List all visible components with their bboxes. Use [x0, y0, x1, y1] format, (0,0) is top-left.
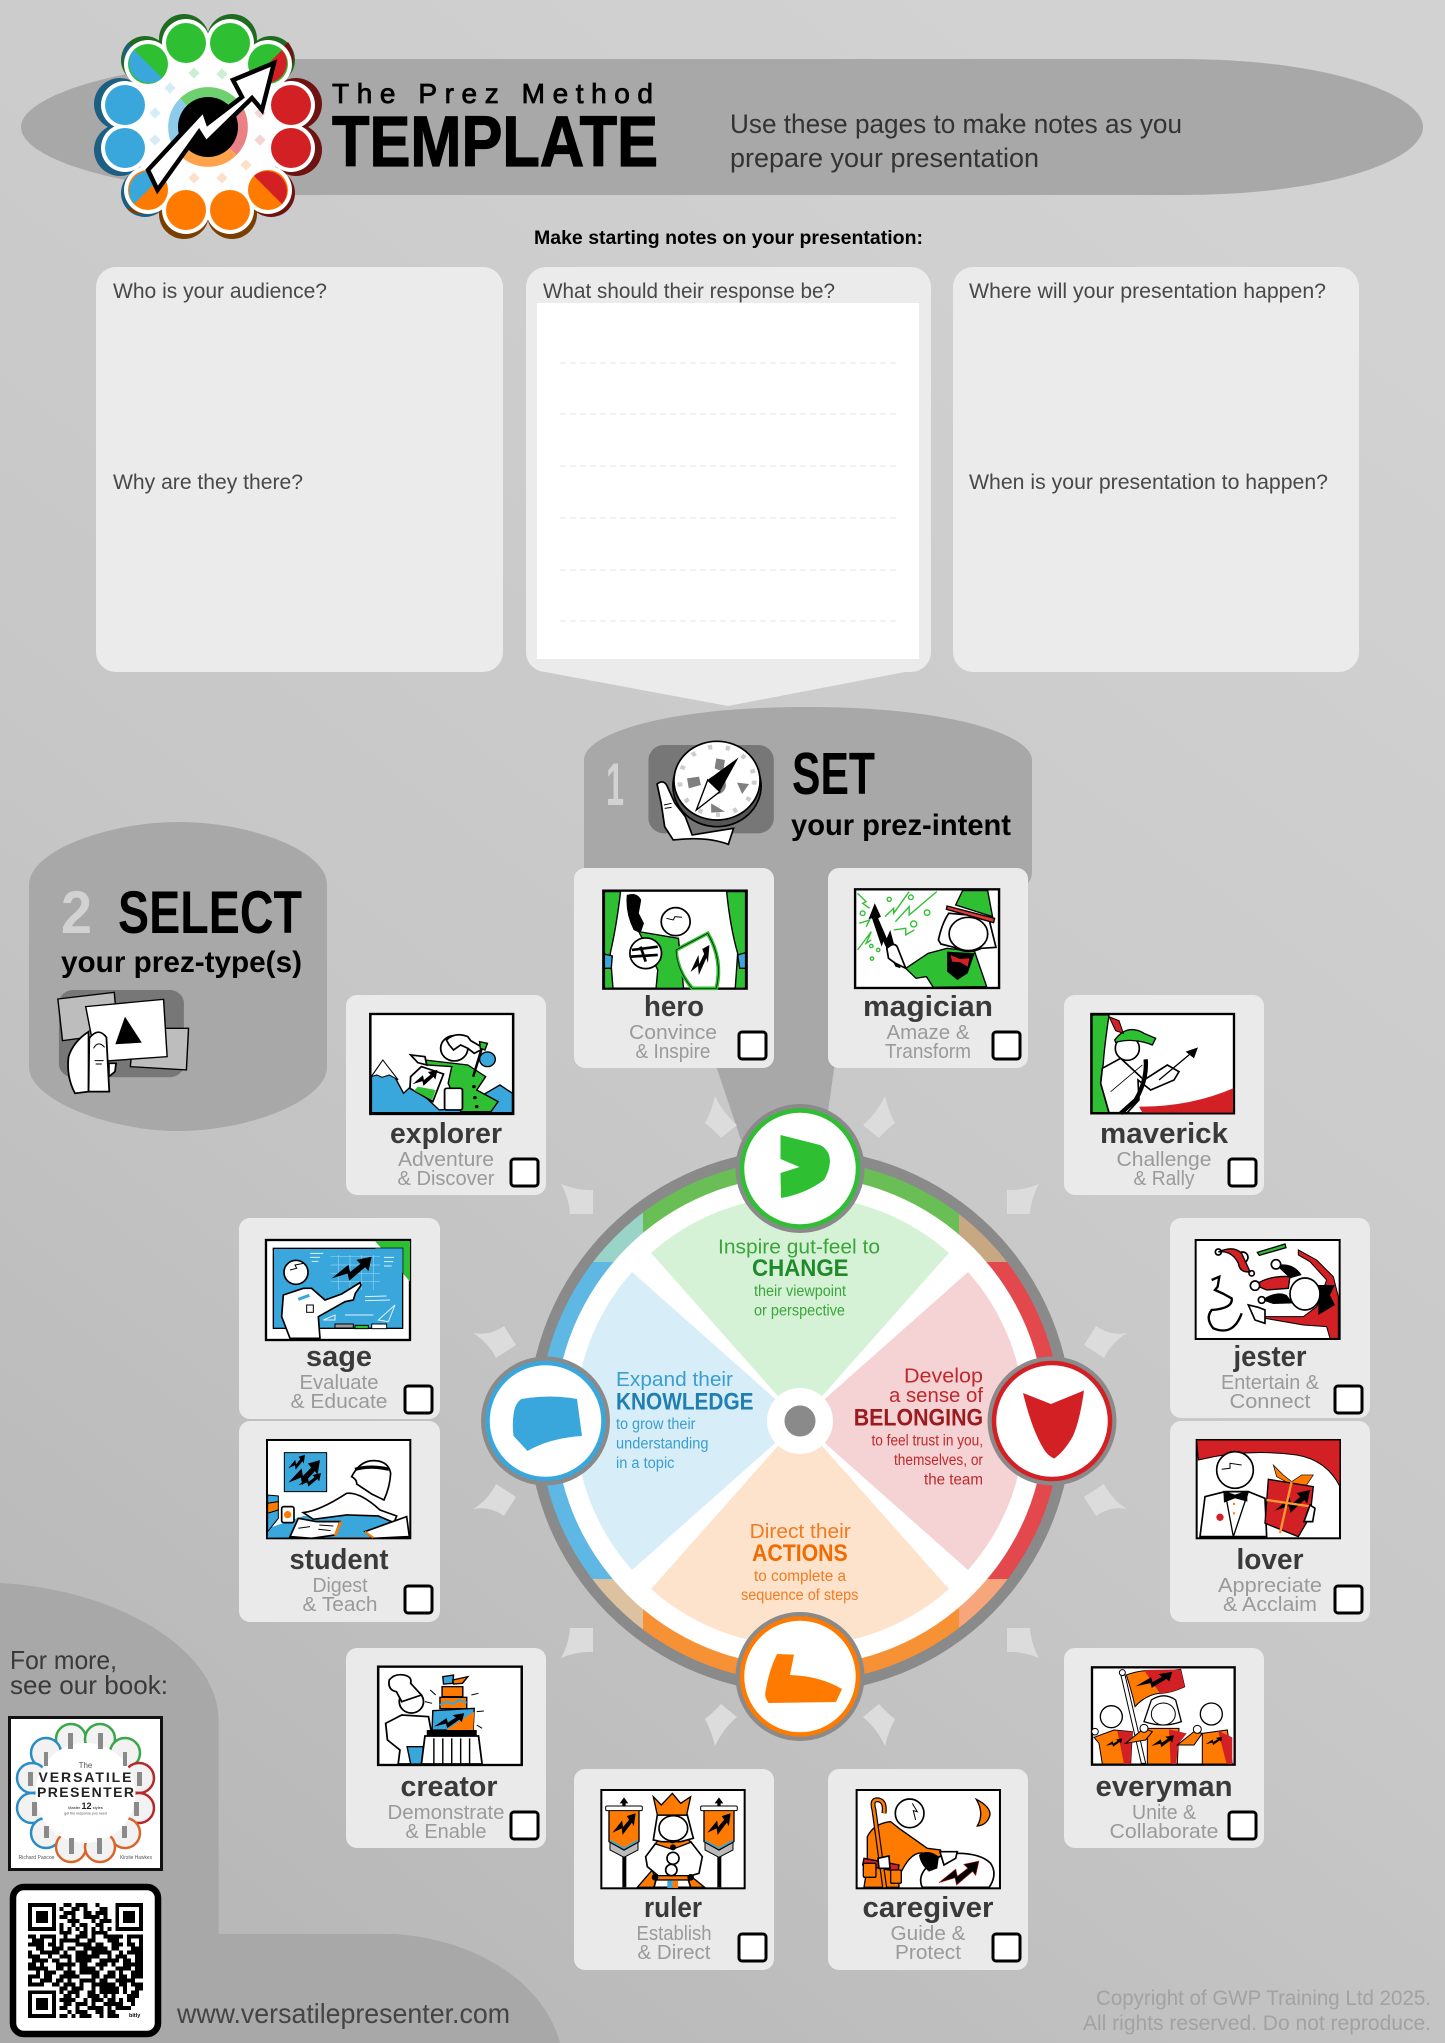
illustration: caregiver: [857, 1790, 1000, 1888]
panel: audience notes: Who is your audience?: [113, 280, 327, 303]
card: everyman: Collaborate: [1110, 1821, 1218, 1843]
card: sage: [239, 1218, 440, 1419]
book cover: Kirstie Hawkes: [120, 1855, 152, 1861]
checkbox: [739, 1032, 766, 1059]
card: everyman: Unite &: [1132, 1802, 1197, 1824]
icon: compass in hand: [648, 741, 774, 844]
text: belonging: to feel trust in you,: [872, 1433, 983, 1450]
book cover: get the response you need: [64, 1812, 107, 1816]
card: hero: [574, 868, 774, 1068]
wedge: knowledge: [575, 1272, 800, 1570]
card: jester: Connect: [1230, 1391, 1311, 1413]
card: lover: & Acclaim: [1223, 1594, 1317, 1616]
card: sage: & Educate: [290, 1391, 388, 1413]
header instructions: prepare your presentation: [730, 143, 1039, 173]
checkbox: [511, 1159, 538, 1186]
card: maverick: Challenge: [1116, 1149, 1212, 1171]
illustration: everyman: [1092, 1667, 1235, 1765]
QR code: bitly: [129, 2013, 141, 2019]
card: caregiver: caregiver: [862, 1892, 994, 1924]
card: hero: & Inspire: [636, 1041, 710, 1063]
panel: step 2 select: your prez-type(s): [61, 946, 302, 979]
panel: where and when notes: [953, 267, 1359, 672]
card: creator: Demonstrate: [388, 1802, 504, 1824]
card: everyman: [1064, 1648, 1264, 1848]
book cover: The: [79, 1761, 93, 1770]
panel: step 1 set: SET: [792, 741, 875, 807]
card: hero: Convince: [629, 1022, 717, 1044]
card: creator: & Enable: [406, 1821, 486, 1843]
panel: response notes with pointer: What should their response be?: [543, 280, 835, 303]
panel: audience notes: [96, 267, 503, 672]
text: change: or perspective: [754, 1302, 845, 1320]
copyright: [1083, 1987, 1431, 2035]
card: student: & Teach: [302, 1594, 378, 1616]
text: knowledge: understanding: [616, 1436, 708, 1453]
panel: where and when notes: Where will your presentation happen?: [969, 280, 1326, 303]
footer panel: [0, 1583, 560, 2043]
checkbox: [993, 1934, 1020, 1961]
text: knowledge: in a topic: [616, 1455, 675, 1472]
panel: step 2 select: [29, 822, 327, 1131]
card: explorer: & Discover: [398, 1168, 495, 1190]
text: knowledge: KNOWLEDGE: [616, 1389, 754, 1416]
card: explorer: [346, 995, 546, 1195]
card: lover: lover: [1236, 1544, 1304, 1576]
card: ruler: [574, 1769, 774, 1970]
card: ruler: ruler: [644, 1892, 702, 1924]
card: jester: [1170, 1218, 1370, 1418]
card: sage: Evaluate: [300, 1372, 378, 1394]
logo: twelve-petal wheel with arrow: [94, 14, 322, 239]
card: lover: [1170, 1421, 1370, 1622]
text: change: their viewpoint: [754, 1283, 847, 1300]
icon node: knowledge: [481, 1356, 610, 1486]
card: caregiver: Protect: [895, 1942, 961, 1964]
card: everyman: everyman: [1096, 1771, 1232, 1803]
panel: step 1 set: [584, 707, 1032, 1140]
book cover: Master 12 styles: [68, 1801, 103, 1811]
card: sage: sage: [306, 1341, 372, 1373]
panel: step 2 select: 2: [61, 879, 92, 946]
card: creator: creator: [400, 1771, 498, 1803]
illustration: explorer: [370, 1014, 513, 1114]
wheel hub: [767, 1388, 833, 1454]
icon: hand holding cards: [58, 990, 189, 1093]
panel: step 1 set: 1: [606, 751, 624, 818]
header band: [21, 59, 1423, 195]
header instructions: Use these pages to make notes as you: [730, 109, 1182, 139]
title: The Prez Method: The Prez Method: [332, 78, 653, 109]
text: actions: [741, 1521, 859, 1604]
decorative sunburst tiles around wheel: [473, 1096, 1127, 1746]
card: maverick: & Rally: [1134, 1168, 1194, 1190]
text: actions: sequence of steps: [741, 1587, 859, 1604]
wedge: actions: [651, 1421, 949, 1646]
icon node: change: [736, 1104, 864, 1233]
card: student: Digest: [312, 1575, 368, 1597]
text: knowledge: to grow their: [616, 1416, 696, 1433]
checkbox: [1335, 1386, 1362, 1413]
card: ruler: Establish: [636, 1923, 712, 1945]
illustration: sage: [266, 1240, 410, 1340]
panel: response notes with pointer: [526, 267, 931, 706]
text: belonging: BELONGING: [854, 1405, 983, 1432]
card: jester: Entertain &: [1221, 1372, 1320, 1394]
illustration: creator: [378, 1667, 522, 1765]
card: caregiver: [828, 1769, 1028, 1970]
card: creator: [346, 1648, 546, 1848]
panel: audience notes: Why are they there?: [113, 471, 303, 494]
text: belonging: Develop: [904, 1366, 983, 1388]
copyright: All rights reserved. Do not reproduce.: [1083, 2012, 1431, 2035]
text: actions: Direct their: [750, 1521, 851, 1543]
card: jester: jester: [1233, 1341, 1306, 1373]
card: magician: Amaze &: [886, 1022, 970, 1044]
card: magician: magician: [863, 991, 993, 1023]
text: change: CHANGE: [752, 1255, 848, 1282]
copyright: Copyright of GWP Training Ltd 2025.: [1096, 1987, 1431, 2010]
illustration: student: [267, 1440, 410, 1538]
checkbox: [405, 1386, 432, 1413]
icon node: actions: [736, 1612, 864, 1741]
illustration: ruler: [601, 1790, 745, 1888]
card: explorer: explorer: [390, 1118, 502, 1150]
wedge: belonging: [800, 1272, 1025, 1570]
text: belonging: [854, 1366, 983, 1489]
website URL: www.versatilepresenter.com: [176, 1998, 510, 2029]
text: knowledge: [616, 1369, 754, 1472]
card: student: student: [290, 1544, 389, 1576]
wedge: change: [651, 1196, 949, 1421]
book cover: PRESENTER: [37, 1784, 134, 1800]
checkbox: [405, 1586, 432, 1613]
card: magician: Transform: [885, 1041, 971, 1063]
text: actions: to complete a: [754, 1568, 846, 1585]
card: lover: Appreciate: [1218, 1575, 1322, 1597]
icon node: belonging: [988, 1356, 1116, 1486]
text: actions: ACTIONS: [752, 1540, 848, 1567]
card: maverick: maverick: [1100, 1118, 1229, 1150]
book cover: [10, 1718, 162, 1870]
checkbox: [993, 1032, 1020, 1059]
card: explorer: Adventure: [398, 1149, 494, 1171]
illustration: jester: [1196, 1240, 1340, 1339]
checkbox: [739, 1934, 766, 1961]
header instructions: [730, 109, 1182, 173]
checkbox: [1335, 1586, 1362, 1613]
card: caregiver: Guide &: [890, 1923, 966, 1945]
text: belonging: themselves, or: [894, 1452, 983, 1469]
book cover: VERSATILE: [38, 1769, 132, 1785]
illustration: hero: [603, 891, 747, 989]
book prompt: see our book:: [10, 1670, 168, 1700]
QR code: [13, 1887, 158, 2034]
checkbox: [1229, 1812, 1256, 1839]
title: TEMPLATE: TEMPLATE: [332, 103, 658, 182]
illustration: magician: [855, 889, 999, 988]
checkbox: [1229, 1159, 1256, 1186]
text: belonging: the team: [924, 1472, 983, 1489]
notes heading: Make starting notes on your presentation:: [534, 228, 923, 249]
card: magician: [828, 868, 1028, 1068]
card: hero: hero: [644, 991, 704, 1023]
card: ruler: & Direct: [638, 1942, 711, 1964]
panel: where and when notes: When is your presentation to happen?: [969, 471, 1328, 494]
text: change: Inspire gut-feel to: [718, 1236, 880, 1258]
panel: step 1 set: your prez-intent: [791, 809, 1011, 842]
central intent wheel: [481, 1104, 1116, 1741]
checkbox: [511, 1812, 538, 1839]
card: student: [239, 1421, 440, 1622]
book cover: Richard Pascoe: [18, 1855, 55, 1861]
text: knowledge: Expand their: [616, 1369, 733, 1391]
illustration: lover: [1197, 1440, 1340, 1538]
illustration: maverick: [1091, 1014, 1234, 1113]
card: maverick: [1064, 995, 1264, 1195]
book prompt: For more,: [10, 1645, 117, 1675]
panel: step 2 select: SELECT: [118, 879, 302, 946]
book prompt: [10, 1645, 168, 1700]
text: belonging: a sense of: [889, 1385, 983, 1407]
text: change: [718, 1236, 880, 1320]
